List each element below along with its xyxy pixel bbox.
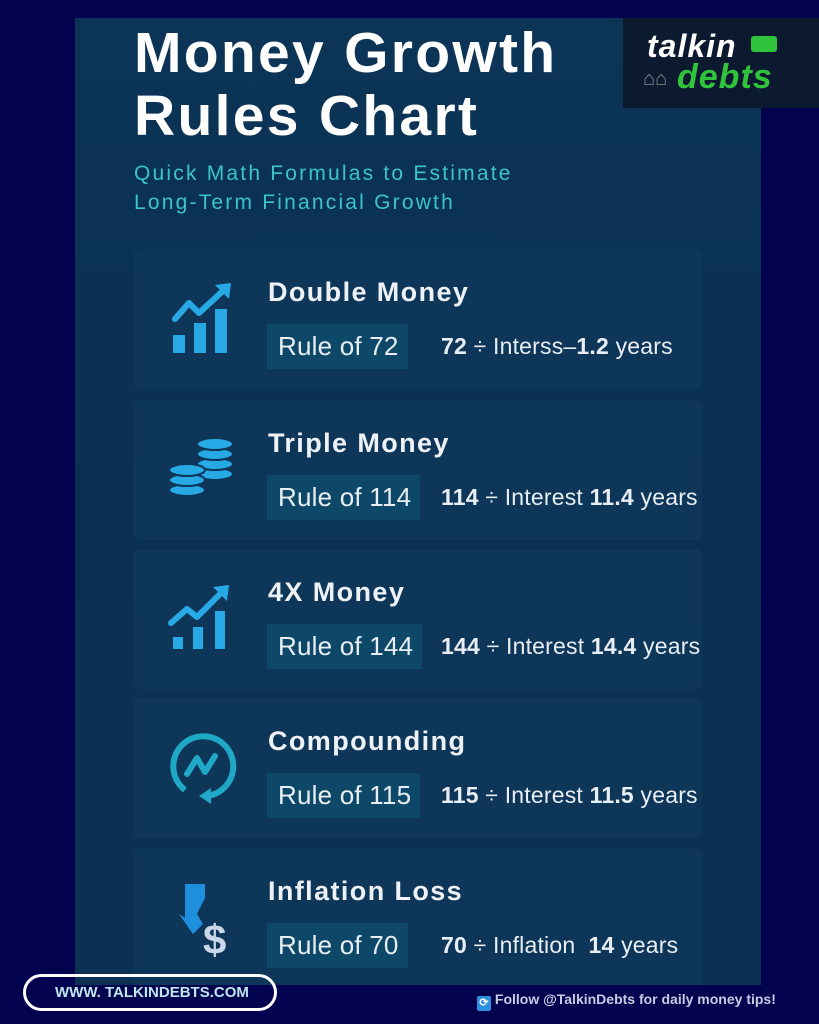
website pill [23,974,277,1011]
card: compounding: 115 ÷ Interest 11.5 years [441,782,698,808]
card: 4x money [133,549,702,689]
title: Rules Chart [134,84,479,148]
card: inflation loss: Rule of 70 [278,930,399,960]
card: triple money: Rule of 114 [278,482,411,512]
icon: down arrow dollar [179,884,226,958]
card: triple money [133,400,702,540]
card: double money: 72 ÷ Interss–1.2 years [441,333,673,359]
card: inflation loss: 70 ÷ Inflation 14 years [441,932,678,958]
title: Money Growth [134,21,557,85]
website pill: WWW. TALKINDEBTS.COM [55,984,249,1001]
subtitle [134,162,513,214]
icon: coins [170,439,232,495]
logo [623,18,819,108]
logo: talkin [647,28,737,64]
icon: bar chart arrow [168,585,229,649]
logo: debts [677,58,773,96]
card: inflation loss [133,848,702,985]
card: compounding: Rule of 115 [278,780,411,810]
icon: cycle [170,733,236,804]
card: triple money: Triple Money [268,428,450,458]
card: double money: Double Money [268,277,469,307]
background panel [75,18,761,985]
icon: bar chart arrow [172,283,231,353]
follow text: ⟳ [479,997,489,1009]
card: compounding: Compounding [268,726,466,756]
subtitle: Quick Math Formulas to Estimate [134,162,513,185]
card: 4x money: 4X Money [268,577,405,607]
card: double money [133,249,702,389]
title [134,21,557,148]
card: 4x money: 144 ÷ Interest 14.4 years [441,633,700,659]
logo: ⌂⌂ [643,68,667,90]
card: compounding [133,698,702,838]
card: 4x money: Rule of 144 [278,631,413,661]
card: triple money: 114 ÷ Interest 11.4 years [441,484,698,510]
follow text: Follow @TalkinDebts for daily money tips! [495,991,776,1007]
subtitle: Long-Term Financial Growth [134,191,455,214]
card: double money: Rule of 72 [278,331,399,361]
card: inflation loss: Inflation Loss [268,876,463,906]
